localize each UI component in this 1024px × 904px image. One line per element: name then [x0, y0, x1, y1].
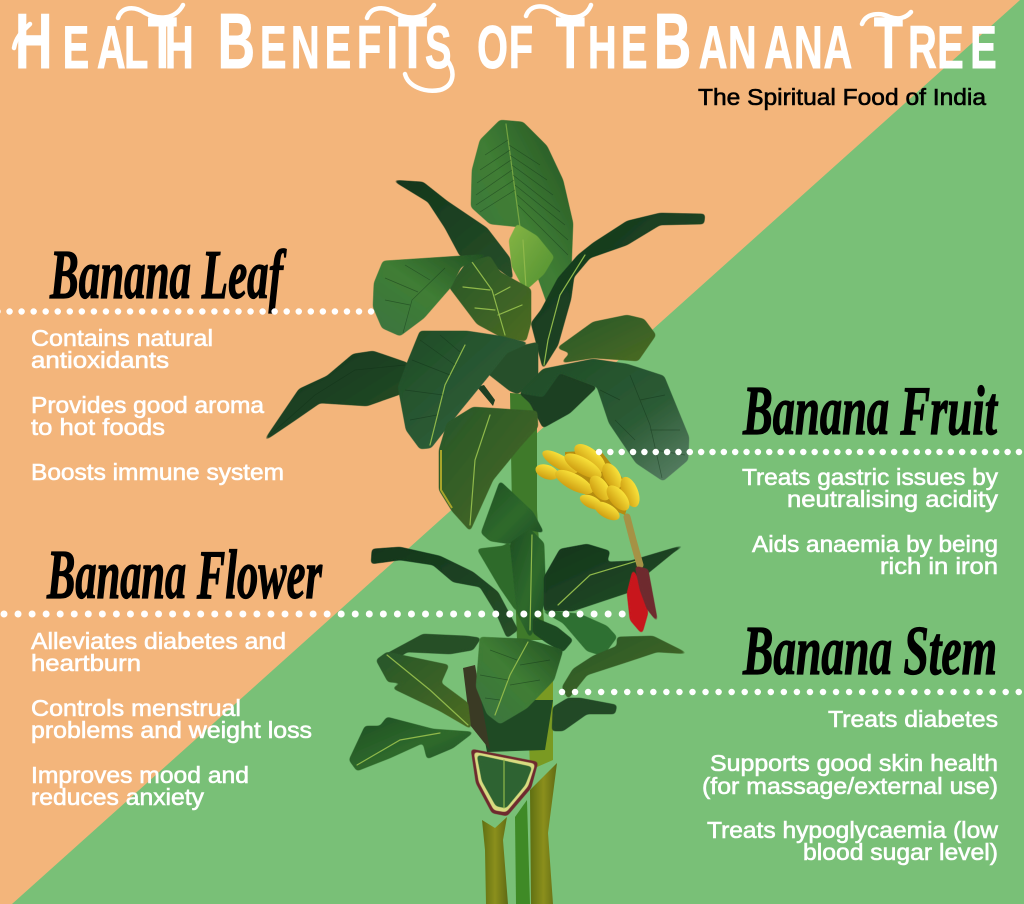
text block: leaf benefits: to hot foods	[31, 414, 165, 440]
text block: flower benefits: Controls menstrual	[31, 695, 241, 721]
dotted rule: flower	[4, 610, 626, 618]
leaf: center with bright veins	[449, 256, 531, 341]
text block: stem benefits: blood sugar level)	[803, 839, 998, 865]
dotted rule: fruit	[599, 449, 1024, 455]
leaf: big right	[519, 359, 689, 481]
panel: banana leaf	[0, 237, 380, 485]
dotted rule: stem	[562, 689, 1024, 695]
leaf: big center left	[398, 331, 529, 449]
text block: leaf benefits: Provides good aroma	[31, 392, 264, 418]
leaf: dark fold	[519, 373, 597, 428]
leaf: right with yellow edge	[557, 315, 656, 363]
leaf: mid left thin	[371, 547, 518, 638]
text block: leaf benefits: antioxidants	[31, 347, 169, 373]
text block: leaf benefits	[31, 325, 284, 485]
leaf: right lower long	[562, 636, 689, 699]
text block: flower benefits: heartburn	[31, 650, 141, 676]
text block: stem benefits	[702, 706, 998, 865]
banana bunch	[533, 439, 643, 524]
text block: fruit benefits	[742, 464, 999, 579]
leaf: left low	[349, 717, 474, 771]
heading: banana leaf: Banana Leaf	[49, 237, 287, 314]
subtitle: The Spiritual Food of India	[698, 84, 986, 110]
leaf: upper left narrow	[392, 180, 513, 280]
leaf: center upright pair	[477, 529, 546, 638]
plant: banana tree	[263, 120, 705, 904]
leaf: small green	[540, 610, 617, 656]
leaf: left bright	[373, 254, 489, 336]
text block: stem benefits: Supports good skin health	[710, 750, 998, 776]
leaf: left middle of lower tier	[376, 652, 471, 729]
text block: flower benefits: problems and weight loss	[31, 717, 312, 743]
leaf: lower with yellow edge	[439, 407, 538, 531]
text block: flower benefits: Improves mood and	[31, 762, 249, 788]
title swashes	[14, 5, 911, 91]
text block: flower benefits	[31, 628, 312, 810]
leaf: left long	[263, 351, 408, 442]
text block: fruit benefits: Treats gastric issues by	[742, 464, 999, 490]
leaf: right lower small	[552, 698, 617, 731]
text block: fruit benefits: Aids anaemia by being	[752, 531, 998, 557]
text block: flower benefits: reduces anxiety	[31, 784, 205, 810]
text block: fruit benefits: rich in iron	[880, 553, 998, 579]
leaf: under center	[487, 342, 538, 394]
leaf: right upward	[531, 213, 705, 369]
leaf: small dark	[533, 617, 573, 652]
panel: banana fruit	[599, 373, 1024, 579]
leaf: top large	[471, 120, 573, 312]
text block: leaf benefits: Boosts immune system	[31, 459, 284, 485]
title	[14, 0, 997, 91]
leaf: big center of lower tier	[476, 637, 563, 724]
leaf: middle upright top	[481, 481, 544, 544]
leaf: right big dark	[544, 544, 687, 611]
text block: stem benefits: Treats hypoglycaemia (low	[707, 817, 998, 843]
title text: HEALTH BENEFITS OF THE BANANA TREE	[15, 0, 997, 86]
text block: stem benefits: Treats diabetes	[828, 706, 998, 732]
upper stem	[463, 385, 553, 770]
leaf: left upper of lower tier	[386, 634, 481, 662]
text block: flower benefits: Alleviates diabetes and	[31, 628, 286, 654]
leaf: bottom variegated	[471, 749, 538, 816]
heading: banana flower: Banana Flower	[46, 537, 322, 614]
banana flower	[627, 566, 658, 634]
text block: fruit benefits: neutralising acidity	[787, 486, 999, 512]
banana stalk	[627, 517, 640, 565]
dotted rule: leaf	[0, 308, 380, 315]
trunks	[482, 763, 557, 904]
panel: banana flower	[4, 537, 626, 810]
text block: leaf benefits: Contains natural	[31, 325, 213, 351]
panel: banana stem	[562, 613, 1024, 865]
text block: stem benefits: (for massage/external use)	[702, 773, 998, 799]
leaf: light green young	[509, 224, 554, 291]
